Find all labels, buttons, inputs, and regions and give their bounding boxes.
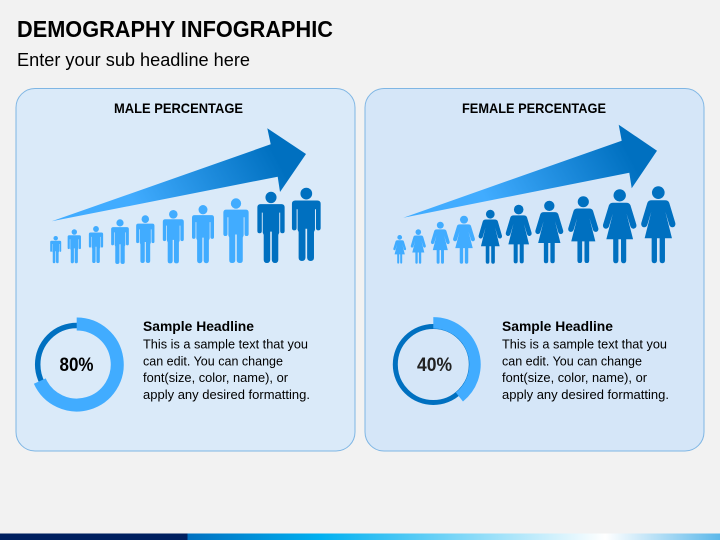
icon: male figure 4 (111, 219, 129, 264)
icon: male figure 10 (292, 188, 321, 261)
panel background (16, 88, 355, 451)
panel background (365, 88, 704, 451)
panel: male percentage (16, 88, 355, 451)
icon: male figure 6 (163, 210, 184, 263)
text block: can edit. You can change (143, 354, 283, 368)
panel: female percentage (365, 88, 704, 451)
icon: male figure 8 (223, 198, 249, 263)
male figures row (50, 188, 321, 264)
icon: female figure 3 (431, 222, 450, 264)
text block: apply any desired formatting. (502, 388, 669, 402)
icon: female figure 1 (393, 235, 406, 264)
icon: female figure 4 (453, 216, 475, 264)
panel heading: MALE PERCENTAGE (114, 100, 243, 116)
text block (502, 318, 669, 402)
panel heading: FEMALE PERCENTAGE (462, 100, 606, 116)
donut chart: 40% (395, 323, 475, 402)
icon: male figure 2 (68, 229, 81, 263)
bottom bar (0, 534, 720, 540)
arrow: growth (52, 128, 306, 221)
icon: male figure 5 (136, 215, 154, 263)
arrow: growth (403, 125, 657, 218)
icon: female figure 5 (479, 210, 502, 264)
donut chart: 40%: 40% (417, 355, 452, 376)
text block: can edit. You can change (502, 354, 642, 368)
donut chart: 80%: 80% (60, 355, 94, 376)
subtitle: Enter your sub headline here (17, 50, 250, 70)
icon: male figure 7 (192, 205, 214, 263)
text block: font(size, color, name), or (502, 371, 647, 385)
icon: male figure 3 (89, 226, 103, 263)
female figures row (393, 186, 675, 264)
icon: male figure 1 (50, 236, 61, 263)
icon: female figure 7 (535, 201, 563, 263)
title: DEMOGRAPHY INFOGRAPHIC (17, 16, 333, 42)
donut chart: 80% (38, 324, 117, 405)
icon: male figure 9 (257, 192, 285, 263)
text block (143, 318, 310, 402)
text block: This is a sample text that you (502, 338, 667, 352)
icon: female figure 8 (568, 196, 598, 263)
text block: font(size, color, name), or (143, 371, 288, 385)
text block: apply any desired formatting. (143, 388, 310, 402)
text block: Sample Headline (143, 318, 254, 334)
icon: female figure 6 (506, 205, 532, 263)
icon: female figure 2 (411, 229, 426, 264)
text block: This is a sample text that you (143, 338, 308, 352)
icon: female figure 10 (641, 186, 675, 263)
text block: Sample Headline (502, 318, 613, 334)
icon: female figure 9 (603, 189, 636, 263)
